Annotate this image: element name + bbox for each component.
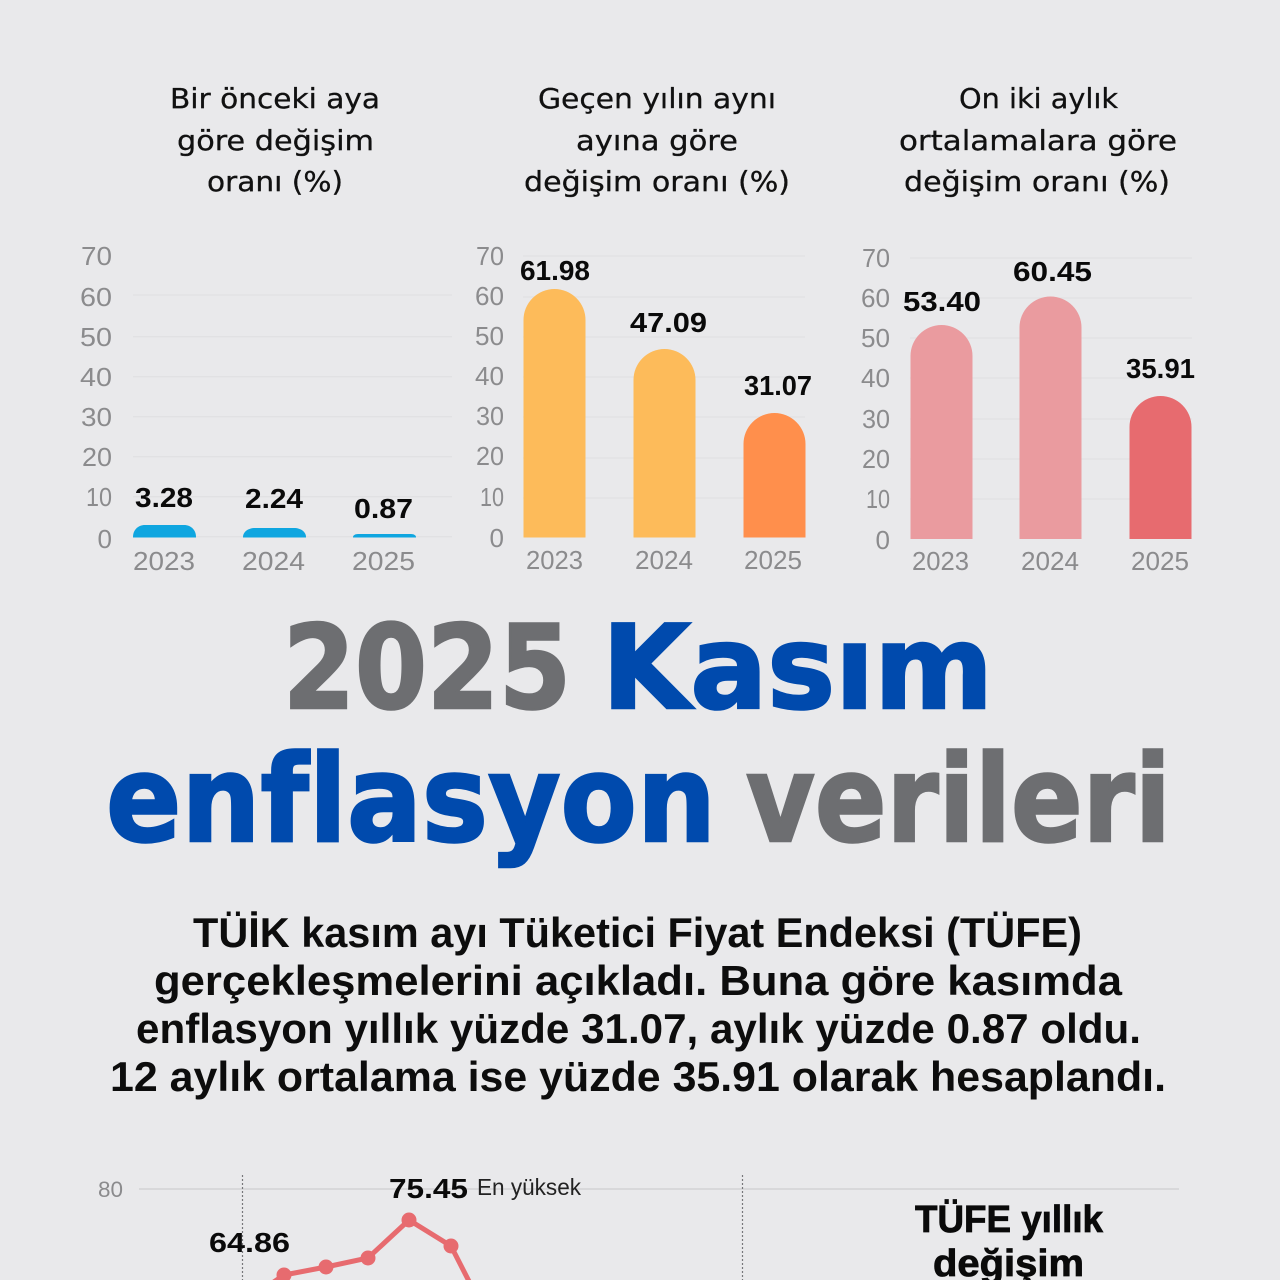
bars xyxy=(910,296,1192,539)
title: Kasım xyxy=(602,601,993,736)
bars xyxy=(133,525,416,538)
value labels: 2.24 xyxy=(245,483,303,514)
value labels: 31.07 xyxy=(744,370,812,401)
heading: twelve month average change: On iki aylık xyxy=(959,82,1119,115)
y axis labels: 0 xyxy=(876,525,890,555)
heading: monthly change: Bir önceki aya xyxy=(170,82,380,115)
highest label: En yüksek xyxy=(477,1174,581,1200)
year labels xyxy=(526,545,802,575)
line chart: annual CPI xyxy=(98,1173,1179,1280)
year labels: 2023 xyxy=(526,545,583,575)
summary text block xyxy=(110,909,1166,1100)
y axis labels: 10 xyxy=(866,484,890,514)
y axis labels: 30 xyxy=(476,401,504,431)
y axis labels xyxy=(80,241,112,554)
year labels xyxy=(912,546,1189,576)
heading: annual change: ayına göre xyxy=(576,124,738,157)
year labels xyxy=(133,546,415,576)
y axis labels: 50 xyxy=(475,321,504,351)
y axis labels: 60 xyxy=(475,281,504,311)
title: enflasyon xyxy=(106,731,716,870)
year labels: 2023 xyxy=(133,546,195,576)
y axis labels: 40 xyxy=(475,361,504,391)
bar chart: twelve month average change xyxy=(861,243,1195,576)
y axis labels xyxy=(475,241,504,553)
year labels: 2023 xyxy=(912,546,969,576)
heading: annual CPI change xyxy=(915,1198,1104,1280)
value labels: 60.45 xyxy=(1013,256,1092,287)
y axis labels: 10 xyxy=(86,482,112,512)
y axis labels: 50 xyxy=(80,322,112,352)
heading: annual change xyxy=(524,82,790,198)
heading: twelve month average change: değişim oranı (%) xyxy=(904,165,1170,198)
data line xyxy=(262,1212,476,1280)
value labels: 35.91 xyxy=(1126,353,1195,384)
year labels: 2025 xyxy=(352,546,415,576)
value labels xyxy=(135,482,413,524)
title: verileri xyxy=(746,731,1171,870)
heading: monthly change xyxy=(170,82,380,198)
value label 64.86: 64.86 xyxy=(209,1227,290,1258)
y axis labels: 30 xyxy=(862,404,890,434)
y axis labels: 50 xyxy=(861,323,890,353)
value labels: 47.09 xyxy=(630,307,707,338)
y axis labels: 40 xyxy=(861,363,890,393)
y axis labels: 70 xyxy=(81,241,112,271)
heading: annual change: değişim oranı (%) xyxy=(524,165,790,198)
heading: monthly change: göre değişim xyxy=(177,124,374,157)
year labels: 2024 xyxy=(635,545,693,575)
y axis labels: 20 xyxy=(476,441,504,471)
y axis labels: 10 xyxy=(480,482,504,512)
summary text block: gerçekleşmelerini açıkladı. Buna göre kasımda xyxy=(154,957,1123,1004)
year labels: 2025 xyxy=(1131,546,1189,576)
heading: twelve month average change xyxy=(899,82,1177,198)
bar chart: annual change xyxy=(475,241,812,575)
summary text block: enflasyon yıllık yüzde 31.07, aylık yüzde 0.87 oldu. xyxy=(136,1005,1141,1052)
heading: annual CPI change: TÜFE yıllık xyxy=(915,1198,1104,1241)
value labels: 53.40 xyxy=(903,286,981,317)
year labels: 2024 xyxy=(1021,546,1079,576)
year labels: 2024 xyxy=(242,546,305,576)
y axis labels: 20 xyxy=(862,444,890,474)
y axis labels: 20 xyxy=(82,442,112,472)
value labels xyxy=(903,256,1195,384)
value labels xyxy=(520,255,812,401)
title: 2025 xyxy=(283,601,571,736)
y axis labels: 70 xyxy=(476,241,504,271)
y axis labels: 0 xyxy=(98,524,112,554)
y axis labels: 30 xyxy=(81,402,112,432)
heading: annual change: Geçen yılın aynı xyxy=(538,82,776,115)
bar chart: monthly change xyxy=(80,241,452,576)
value labels: 61.98 xyxy=(520,255,590,286)
y axis labels: 70 xyxy=(862,243,890,273)
heading: twelve month average change: ortalamalara göre xyxy=(899,124,1177,157)
y axis labels: 0 xyxy=(490,523,504,553)
y axis labels: 60 xyxy=(861,283,890,313)
value label 75.45: 75.45 xyxy=(389,1173,468,1204)
y axis labels: 40 xyxy=(80,362,112,392)
year labels: 2025 xyxy=(744,545,802,575)
heading: monthly change: oranı (%) xyxy=(207,165,343,198)
y axis labels: 60 xyxy=(80,282,112,312)
y axis labels xyxy=(861,243,890,555)
value labels: 3.28 xyxy=(135,482,193,513)
bars xyxy=(524,289,806,538)
title xyxy=(106,601,1171,870)
axis label 80: 80 xyxy=(98,1177,123,1202)
summary text block: 12 aylık ortalama ise yüzde 35.91 olarak hesaplandı. xyxy=(110,1053,1166,1100)
value labels: 0.87 xyxy=(354,493,413,524)
summary text block: TÜİK kasım ayı Tüketici Fiyat Endeksi (TÜFE) xyxy=(193,909,1082,956)
